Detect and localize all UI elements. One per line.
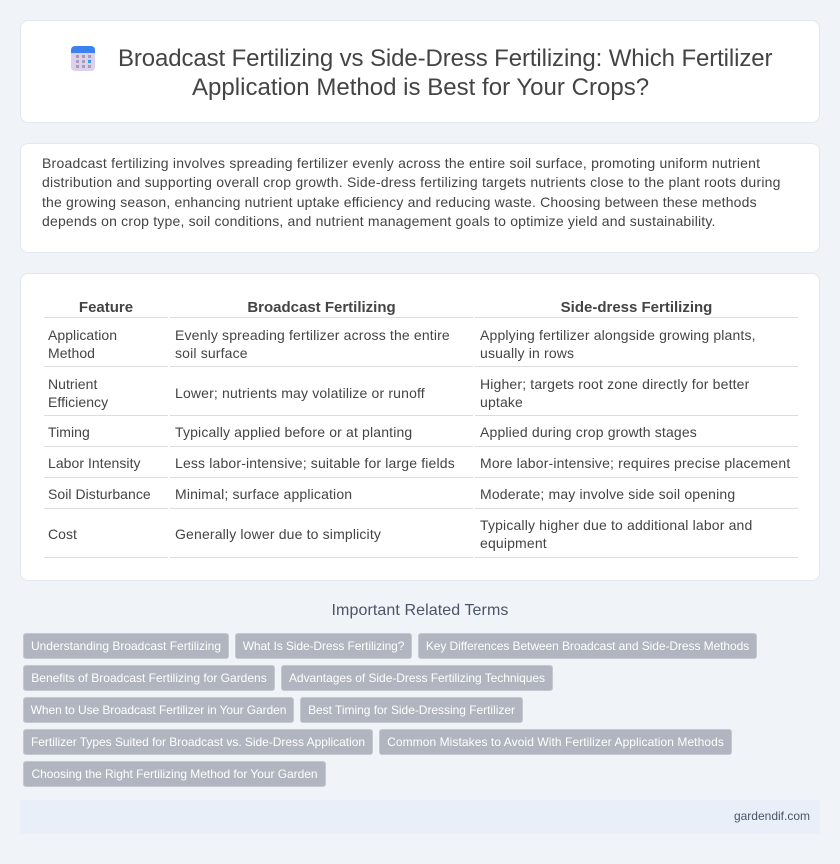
tag: Best Timing for Side-Dressing Fertilizer xyxy=(308,703,515,717)
title xyxy=(118,45,772,101)
row: nutrient efficiency xyxy=(48,376,750,410)
row: soil disturbance: Soil Disturbance xyxy=(48,486,151,502)
row: application method: Method xyxy=(48,345,95,361)
tag: Advantages of Side-Dress Fertilizing Techniques xyxy=(289,671,545,685)
icon: calendar xyxy=(71,46,95,71)
intro text: the growing season, enhancing nutrient uptake efficiency and reducing waste. Choosing between these methods xyxy=(42,194,757,210)
title: Broadcast Fertilizing vs Side-Dress Fertilizing: Which Fertilizer xyxy=(118,45,772,72)
tag: What Is Side-Dress Fertilizing? xyxy=(243,639,404,653)
tag xyxy=(23,633,229,659)
related terms heading: Important Related Terms xyxy=(332,602,508,619)
row: soil disturbance xyxy=(48,486,735,502)
row: nutrient efficiency: Lower; nutrients may volatilize or runoff xyxy=(175,385,425,401)
row: soil disturbance: Minimal; surface application xyxy=(175,486,352,502)
tag xyxy=(23,665,275,691)
table header: broadcast: Broadcast Fertilizing xyxy=(247,299,396,316)
tag xyxy=(23,761,326,787)
row: application method: Applying fertilizer alongside growing plants, xyxy=(480,327,756,343)
tag: Fertilizer Types Suited for Broadcast vs. Side-Dress Application xyxy=(31,735,365,749)
tag xyxy=(418,633,757,659)
row: nutrient efficiency: Nutrient xyxy=(48,376,97,392)
header panel xyxy=(20,20,820,123)
tag: Common Mistakes to Avoid With Fertilizer Application Methods xyxy=(387,735,724,749)
title: Application Method is Best for Your Crops? xyxy=(192,74,649,101)
row: cost xyxy=(48,517,752,551)
row: labor intensity: Less labor-intensive; suitable for large fields xyxy=(175,455,455,471)
intro text xyxy=(42,154,781,229)
row: cost: Cost xyxy=(48,526,77,542)
table header: side-dress: Side-dress Fertilizing xyxy=(561,299,712,316)
row: cost: equipment xyxy=(480,535,547,551)
row: labor intensity: Labor Intensity xyxy=(48,455,141,471)
row: application method xyxy=(48,327,756,361)
tag xyxy=(235,633,412,659)
related terms tags xyxy=(23,633,757,787)
row: cost: Typically higher due to additional labor and xyxy=(480,517,752,533)
tag xyxy=(379,729,732,755)
intro text: depends on crop type, soil conditions, and nutrient management goals to optimize yield and sustainability. xyxy=(42,213,716,229)
row: timing: Applied during crop growth stages xyxy=(480,424,697,440)
tag xyxy=(300,697,523,723)
comparison table panel xyxy=(20,273,820,581)
footer source text: gardendif.com xyxy=(734,809,810,823)
tag xyxy=(23,697,294,723)
tag: Benefits of Broadcast Fertilizing for Gardens xyxy=(31,671,267,685)
row: application method: Application xyxy=(48,327,117,343)
tag: Choosing the Right Fertilizing Method for Your Garden xyxy=(31,767,318,781)
footer bar xyxy=(20,800,820,834)
table header: feature: Feature xyxy=(79,299,133,316)
row: labor intensity: More labor-intensive; requires precise placement xyxy=(480,455,790,471)
tag: When to Use Broadcast Fertilizer in Your Garden xyxy=(31,703,286,717)
intro panel xyxy=(20,143,820,253)
row: application method: Evenly spreading fertilizer across the entire xyxy=(175,327,450,343)
tag: Key Differences Between Broadcast and Side-Dress Methods xyxy=(426,639,749,653)
row: application method: soil surface xyxy=(175,345,248,361)
row: soil disturbance: Moderate; may involve side soil opening xyxy=(480,486,735,502)
row: nutrient efficiency: Higher; targets root zone directly for better xyxy=(480,376,749,392)
row: timing: Timing xyxy=(48,424,90,440)
row: nutrient efficiency: Efficiency xyxy=(48,394,108,410)
tag: Understanding Broadcast Fertilizing xyxy=(31,639,221,653)
tag xyxy=(23,729,373,755)
row: nutrient efficiency: uptake xyxy=(480,394,523,410)
intro text: distribution and supporting overall crop growth. Side-dress fertilizing targets nutrients close to the plant roots during xyxy=(42,174,781,190)
row: timing xyxy=(48,424,697,440)
intro text: Broadcast fertilizing involves spreading fertilizer evenly across the entire soil surface, promoting uniform nutrient xyxy=(42,154,760,170)
row: cost: Generally lower due to simplicity xyxy=(175,526,381,542)
row: application method: usually in rows xyxy=(480,345,574,361)
tag xyxy=(281,665,553,691)
row: timing: Typically applied before or at planting xyxy=(175,424,412,440)
row: labor intensity xyxy=(48,455,790,471)
